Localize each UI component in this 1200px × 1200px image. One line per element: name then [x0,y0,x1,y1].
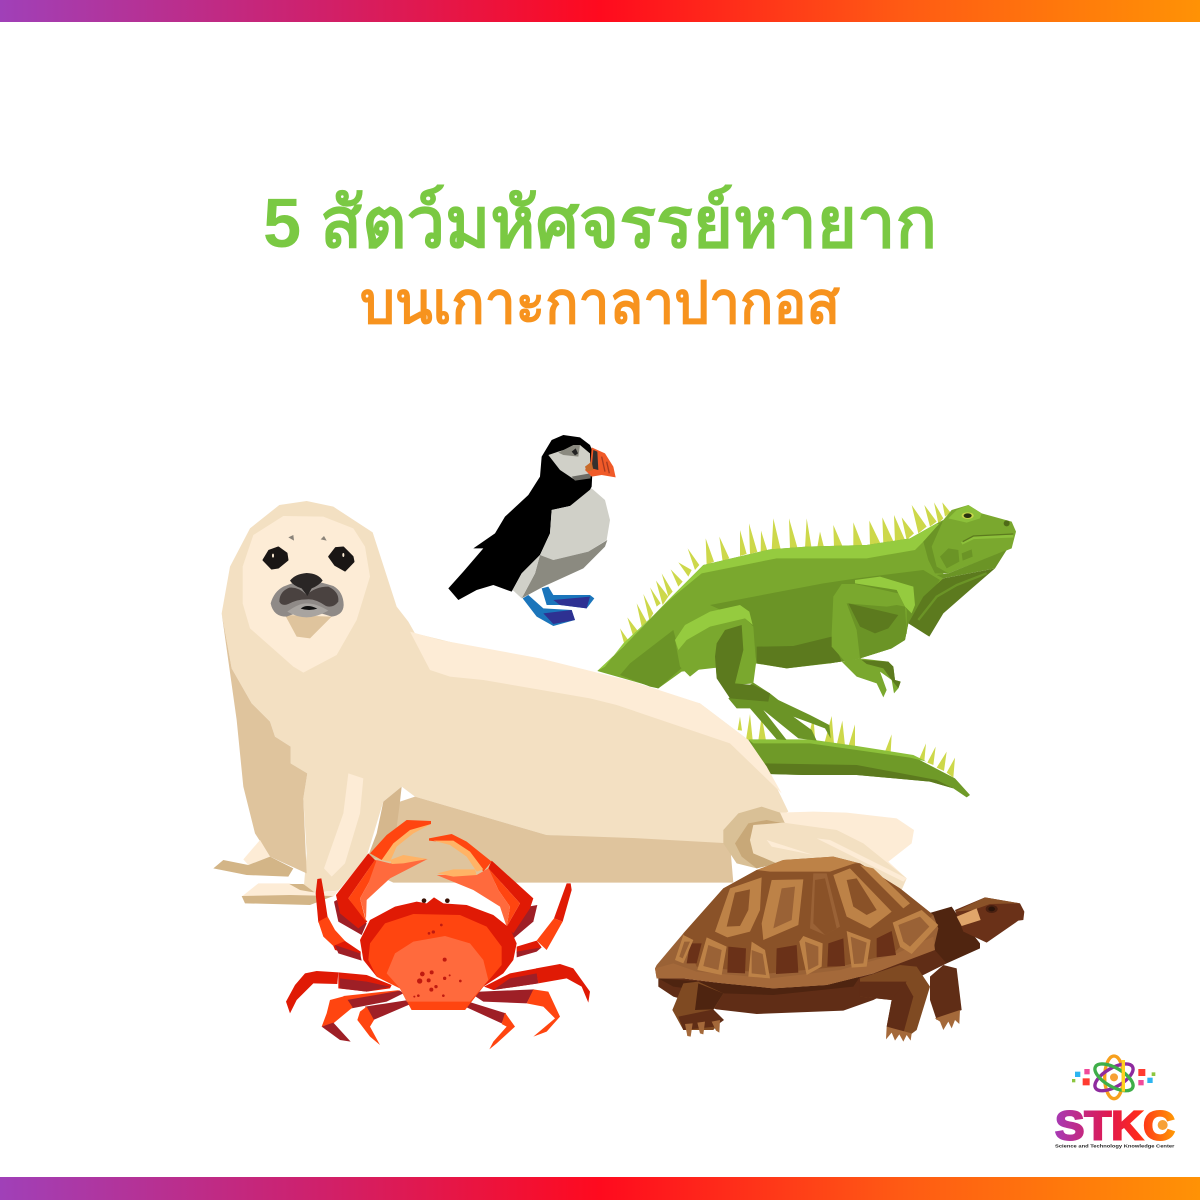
iguana rear foot [728,683,831,741]
turtle shell [655,857,938,988]
logo wordmark: STKC [1055,1102,1175,1148]
iguana front leg [832,577,915,697]
seal [213,501,914,905]
logo atom icon [1091,1056,1137,1099]
iguana tail [748,739,970,797]
seal tail flipper [723,807,914,890]
seal rear flipper left [213,840,293,877]
iguana head [923,505,1016,578]
crab left walking legs [286,878,411,1045]
puffin black body [448,435,593,600]
STKC logo [1055,1056,1175,1150]
crab right claw [429,834,533,933]
crab [286,820,590,1049]
turtle [655,857,1024,1042]
crab left claw [336,820,431,928]
iguana rear leg [675,605,770,702]
title: line 2: บนเกาะกาลาปากอส [360,271,841,336]
turtle lower scutes [675,931,896,978]
turtle front leg [860,965,930,1042]
turtle far leg [930,965,962,1030]
seal foreleg highlight [324,773,363,877]
logo caption: Science and Technology Knowledge Center [1055,1144,1174,1150]
turtle neck and head [927,897,1024,967]
seal eyes [263,535,354,571]
seal muzzle [271,573,344,617]
iguana body [597,520,943,688]
seal belly shadow [367,797,733,883]
top gradient bar [0,0,1200,22]
seal main body [222,501,788,893]
logo orange dot [1158,1120,1168,1130]
turtle rear leg [672,982,724,1037]
puffin cheek [548,445,591,481]
logo pixel squares [1072,1069,1155,1085]
seal face [243,516,370,673]
iguana [597,502,1016,797]
bottom gradient bar [0,1177,1200,1200]
crab shell [360,897,517,1010]
seal back highlight [410,632,782,793]
puffin [448,435,616,626]
puffin feet [523,587,594,626]
crab claw arm undersides [334,900,537,940]
iguana neck [908,568,995,637]
title: line 1: 5 สัตว์มหัศจรรย์หายาก [263,184,937,262]
seal foreleg shadow [367,787,402,860]
turtle underside [658,948,947,1014]
crab shell spots [413,924,462,998]
seal left shadow [222,613,307,873]
crab right walking legs [465,883,590,1049]
turtle large scutes [715,868,938,954]
iguana spikes [620,502,955,778]
seal front flipper [242,883,338,905]
puffin belly [513,488,610,598]
puffin beak [585,447,616,477]
